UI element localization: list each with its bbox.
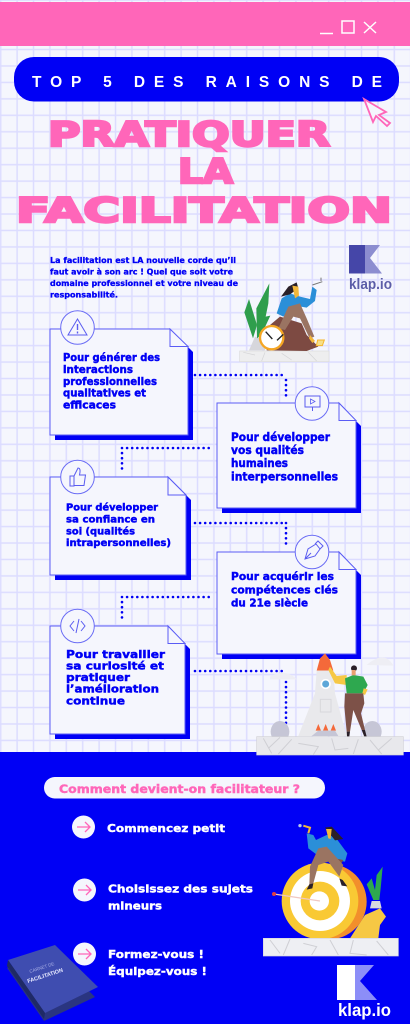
illustration: woman on target [263, 824, 398, 956]
panel: card 1: efficaces [63, 400, 116, 412]
panel: card 4: Pour acquérir les [231, 570, 334, 583]
connector dots [122, 375, 286, 726]
panel: card 2: vos qualités [231, 444, 304, 457]
panel: card 4 [217, 535, 361, 659]
window title bar [0, 2, 410, 46]
intro text: domaine professionnel et votre niveau de [50, 279, 239, 288]
panel: card 3: sa confiance en [66, 514, 155, 526]
title [16, 115, 392, 231]
illustration: book stack: FACILITATION [27, 968, 64, 985]
panel: card 2: interpersonnelles [231, 470, 338, 484]
panel: card 4: compétences clés [231, 584, 338, 596]
panel: card 2: Pour développer [231, 431, 330, 444]
subheading pill: Comment devient-on facilitateur ? [59, 782, 300, 796]
panel: card 3: Pour développer [66, 502, 158, 514]
illustration: book stack: CARNET DE [29, 961, 55, 974]
panel: card 3: soi (qualités [66, 526, 135, 538]
title: PRATIQUER [48, 115, 330, 155]
panel: card 4: du 21e siècle [231, 596, 308, 610]
subheading pill [44, 777, 325, 798]
step 3 [73, 942, 207, 978]
panel: card 1 [50, 311, 193, 440]
bottom blue section [0, 752, 410, 1024]
title: LA [178, 152, 234, 192]
logo: klap.io bottom: klap.io [338, 1000, 391, 1020]
intro text: responsabilité. [50, 290, 118, 300]
panel: card 5: l’amélioration [66, 682, 159, 696]
step 1 [72, 816, 225, 838]
panel: card 2: humaines [231, 457, 288, 470]
intro text: faut avoir à son arc ! Quel que soit votre [50, 268, 234, 276]
panel: card 5: continue [66, 694, 125, 708]
intro text: La facilitation est LA nouvelle corde qu’il [50, 256, 236, 265]
step 3: Équipez-vous ! [108, 965, 207, 978]
panel: card 1: Pour générer des [63, 352, 160, 364]
logo: klap.io top: klap.io [349, 277, 392, 293]
panel: card 3 [50, 460, 191, 580]
panel: card 1: qualitatives et [63, 388, 146, 400]
heading pill: top 5 des raisons de [14, 57, 399, 102]
panel: card 5: Pour travailler [66, 648, 166, 661]
step 3: Formez-vous ! [108, 949, 204, 961]
illustration: man with rocket [257, 653, 403, 755]
panel: card 1: interactions [63, 364, 133, 376]
step 1: Commencez petit [107, 823, 225, 835]
panel: card 5: sa curiosité et [66, 660, 164, 672]
panel: card 5 [50, 609, 190, 739]
panel: card 3: intrapersonnelles) [66, 538, 171, 549]
logo: klap.io bottom [337, 965, 391, 1020]
step 2: mineurs [108, 900, 162, 912]
logo: klap.io top [349, 245, 392, 293]
title: FACILITATION [16, 191, 392, 231]
intro text [50, 256, 239, 300]
icon: cursor arrow [364, 99, 390, 126]
illustration: woman sitting on rock with clock [240, 278, 329, 362]
panel: card 5: pratiquer [66, 671, 131, 684]
heading pill: top 5 des raisons de: TOP 5 DES RAISONS DE [32, 74, 382, 91]
panel: card 1: professionnelles [63, 376, 157, 388]
illustration: book stack [7, 945, 98, 1021]
step 2: Choisissez des sujets [108, 884, 253, 896]
panel: card 2 [217, 387, 361, 513]
step 2 [73, 878, 253, 912]
